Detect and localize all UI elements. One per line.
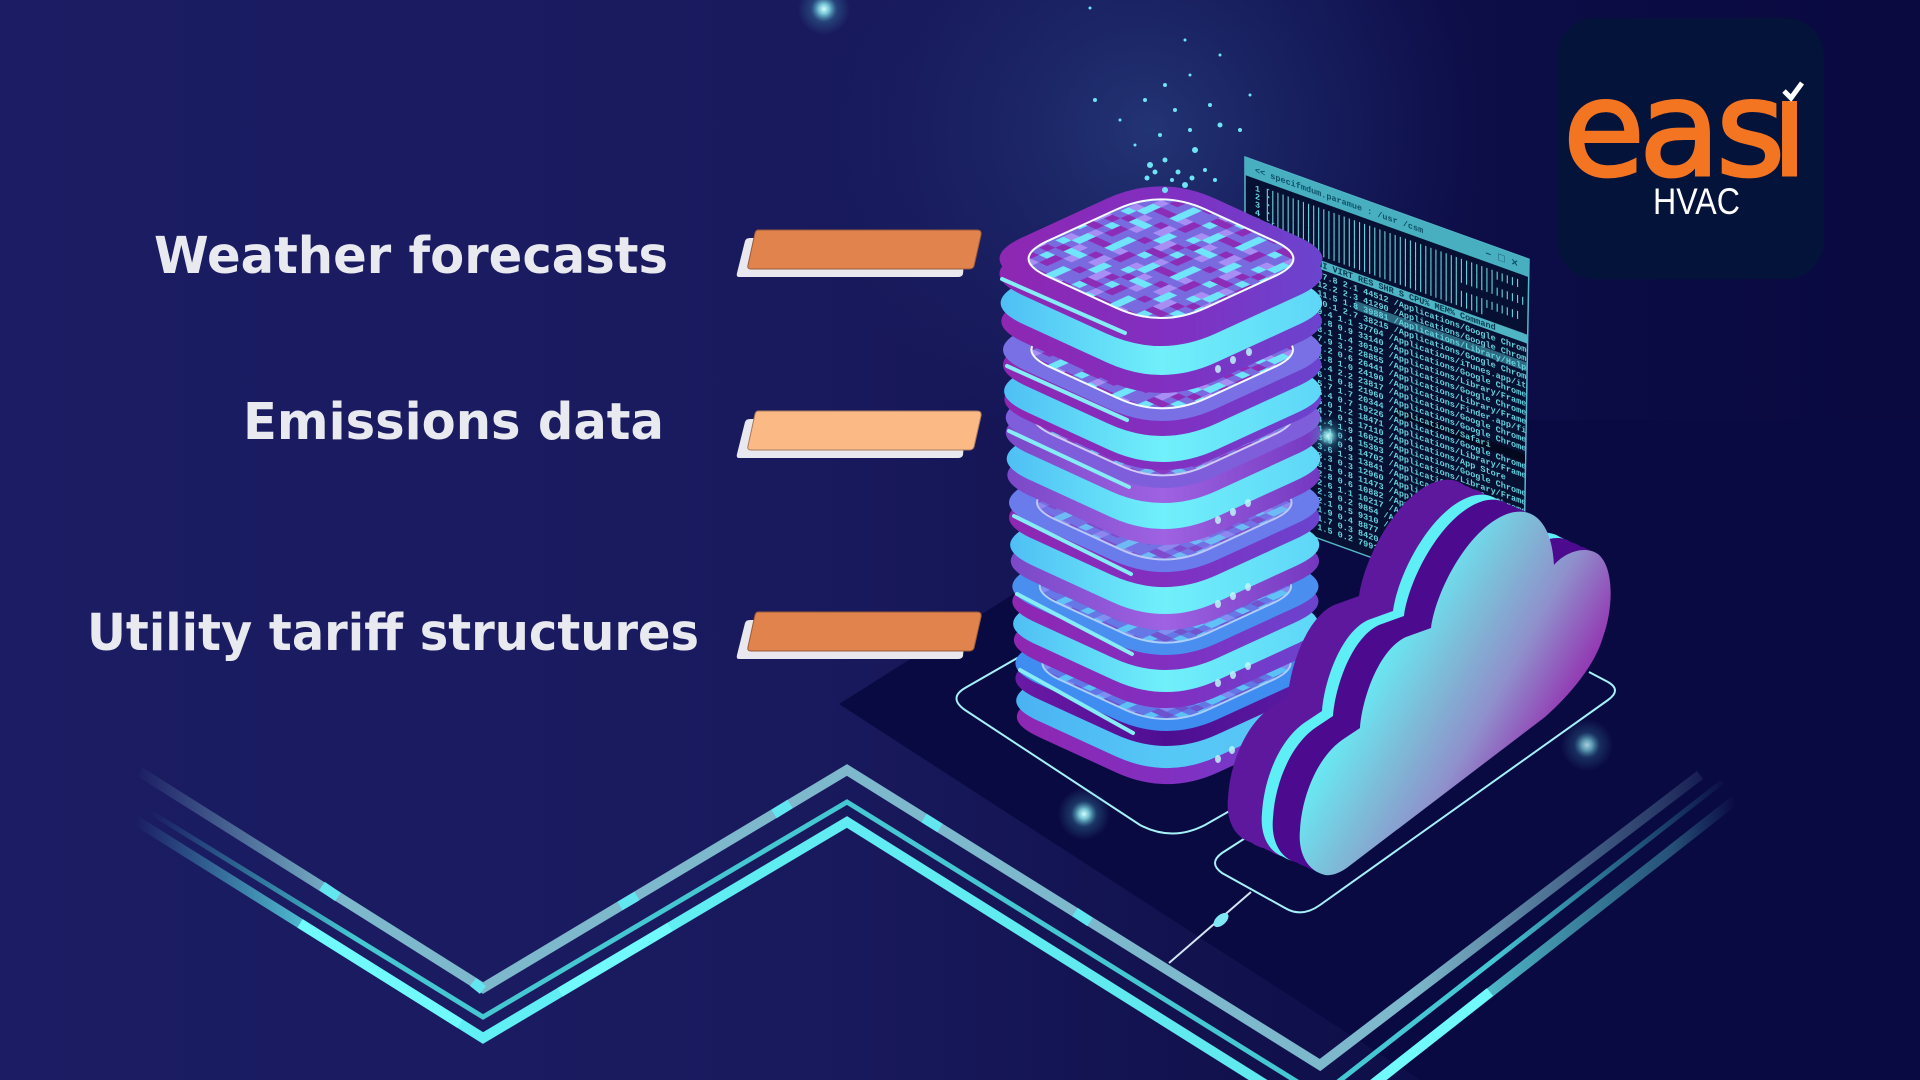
cloud bbox=[1228, 480, 1611, 875]
terminal window panel: 33344 3219 7 1.5 0.2 7991 /Applications/Google Chrome bbox=[1251, 498, 1521, 605]
terminal window panel: 33331 3219 7 2.1 0.5 9310 /Applications/Google Chrome bbox=[1251, 471, 1521, 578]
terminal window panel: 33335 3219 7 1.9 0.4 8877 /Applications/Google Chrome bbox=[1251, 480, 1521, 587]
logo: easi HVAC bbox=[1557, 18, 1824, 279]
zigzag circuit lines bbox=[135, 770, 1735, 1080]
bar: Utility tariff structures bbox=[737, 612, 981, 659]
terminal window panel: 33278 3219 7 5.4 0.7 19226 /Applications/Google Chrome bbox=[1251, 363, 1526, 472]
logo: easi HVAC: easi bbox=[1563, 53, 1808, 207]
terminal window panel: 33281 3219 7 5.0 1.2 18471 /Applications/Library/Frames bbox=[1251, 372, 1531, 483]
terminal window panel: 33339 3219 7 1.7 0.3 8420 /Applications/Library/Frames bbox=[1251, 489, 1526, 598]
logo: easi HVAC: HVAC bbox=[1653, 181, 1740, 222]
label: Weather forecasts: Weather forecasts bbox=[154, 227, 668, 286]
terminal window panel: 33220 3219 7 11.5 1.8 39881 /Applications/Library/Helper bbox=[1251, 264, 1536, 377]
terminal window panel: 33237 3219 7 8.8 0.9 33140 /Applications/Google Chrome bbox=[1251, 291, 1526, 400]
terminal window panel: 33214 3219 7 27.8 2.1 44512 /Applications/Google Chrome bbox=[1251, 246, 1531, 357]
terminal window panel: 33290 3219 7 4.4 1.9 16028 /Applications/Google Chrome bbox=[1251, 390, 1526, 499]
terminal window panel: Swp[||||||||||||||||||||||||||||||||||||||||| bbox=[1255, 224, 1484, 316]
bar: Emissions data bbox=[737, 411, 981, 458]
terminal window panel: 33251 3219 7 7.2 0.6 26441 /Applications/Library/Frames bbox=[1251, 318, 1531, 429]
terminal window panel: 33240 3219 7 8.1 1.4 30192 /Applications/Library/Frames bbox=[1251, 300, 1531, 411]
terminal window panel: 33299 3219 7 3.9 0.9 14702 /Applications/Google Chrome bbox=[1251, 408, 1526, 517]
glowing particles bbox=[1088, 6, 1252, 193]
terminal window panel: 33268 3219 7 6.1 0.8 21960 /Applications/Google Chrome bbox=[1251, 345, 1526, 454]
terminal window panel: 33317 3219 7 2.8 0.6 10882 /Applications/Finder.app/find bbox=[1251, 444, 1536, 557]
terminal window panel: 33256 3219 7 6.8 1.0 24190 /Applications/Finder.app/find bbox=[1251, 327, 1536, 440]
label: Emissions data: Emissions data bbox=[243, 393, 664, 452]
terminal window panel: << specifmdum.paramue : /usr /csm bbox=[1255, 166, 1423, 236]
top screen mosaic bbox=[1029, 199, 1293, 318]
terminal window panel: 4 [||||||||||||||||||||||||||||||||||||| bbox=[1255, 208, 1459, 291]
bar: Weather forecasts bbox=[737, 230, 981, 277]
terminal window panel: 33312 3219 7 3.1 0.8 11473 /Applications/Google Chrome bbox=[1251, 435, 1526, 544]
icon: check mark bbox=[1784, 83, 1802, 98]
terminal window panel: Mem[|||||||||||||||||||||||||||||||||||||||||||||||| bbox=[1255, 216, 1520, 321]
terminal window panel: 33308 3219 7 3.3 0.3 12960 /Applications/Library/Frames bbox=[1251, 426, 1531, 537]
glow spots bbox=[798, 0, 1613, 840]
status dots bbox=[1215, 348, 1252, 763]
terminal window panel: 3 [|||||||||||||||||||||||||||||||||||||||||||||||||| bbox=[1255, 200, 1525, 307]
terminal window panel: 33231 3219 7 9.4 1.1 37704 /Applications/iTunes.app/itun bbox=[1251, 282, 1536, 395]
terminal window panel: 33215 3219 7 12.2 2.3 41290 /Applications/Google Chrome bbox=[1251, 255, 1531, 366]
terminal window panel: 33294 3219 7 4.1 0.4 15393 /Applications/Library/Frames bbox=[1251, 399, 1531, 510]
terminal window panel: 33272 3219 7 5.7 1.7 20344 /Applications/Safari bbox=[1251, 354, 1491, 450]
terminal window panel: 33260 3219 7 6.4 2.2 23817 /Applications/Google Chrome bbox=[1251, 336, 1526, 445]
terminal window panel bbox=[1244, 156, 1530, 558]
terminal window panel: – □ × bbox=[1485, 248, 1518, 271]
side light strips bbox=[1002, 279, 1133, 733]
terminal window panel: 33303 3219 7 3.6 1.3 13841 /Applications/Google Chrome bbox=[1251, 417, 1526, 526]
connector line with node bbox=[1169, 892, 1251, 963]
terminal window panel: 33244 3219 7 7.9 3.2 28855 /Applications/Google Chrome bbox=[1251, 309, 1526, 418]
server tower bbox=[1000, 186, 1322, 784]
terminal window panel: 33326 3219 7 2.3 0.2 9854 /Applications/Library/Frames bbox=[1251, 462, 1526, 571]
terminal window panel: 1 [||||||||||||||||||||||||||||||||||||||||||||||||| bbox=[1255, 184, 1520, 289]
label: Utility tariff structures: Utility tariff structures bbox=[87, 604, 699, 663]
platform outlines bbox=[956, 645, 1615, 912]
terminal window panel: 2 [|||||||||||||||||||||||||||||||||||||||||||| bbox=[1255, 192, 1495, 288]
terminal window panel: 33287 3219 7 4.7 0.5 17110 /Applications/App Store bbox=[1251, 381, 1506, 483]
isometric platform shadow bbox=[839, 420, 1920, 1080]
terminal window panel: 33320 3219 7 2.6 1.1 10217 /Applications/Google Chrome bbox=[1251, 453, 1526, 562]
terminal window panel: 33224 3219 7 10.1 2.7 38215 /Applications/Google Chrome bbox=[1251, 273, 1531, 384]
terminal window panel: PID USER PRI NI VIRT RES SHR S CPU% MEM% Command bbox=[1251, 235, 1496, 333]
